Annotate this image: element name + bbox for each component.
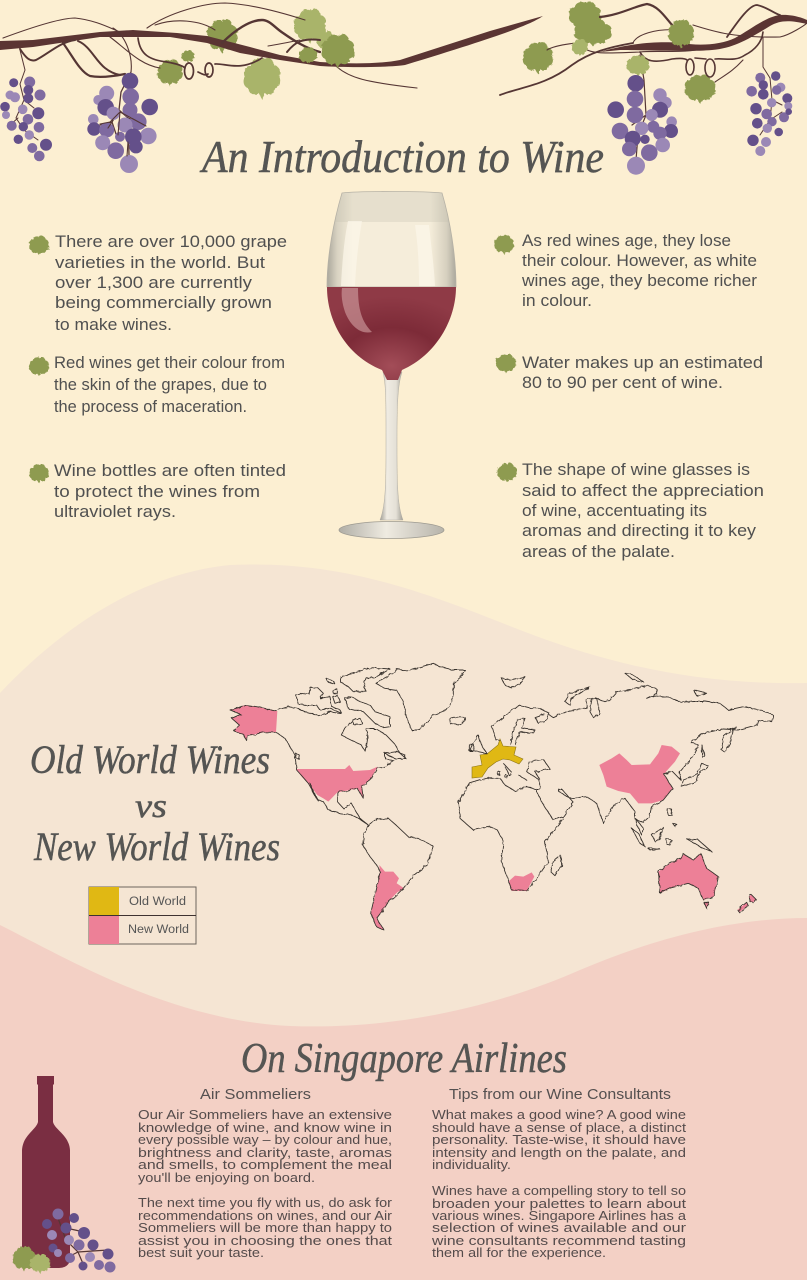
text: There are over 10,000 grape [55, 232, 287, 251]
text: Red wines get their colour from [54, 353, 285, 372]
icon: leaf bullet [494, 235, 514, 254]
icon: wine bottle with grapes [13, 1076, 115, 1273]
fact: tinted bottles [29, 461, 286, 521]
paragraph 1 [432, 1107, 686, 1172]
branch [600, 15, 807, 52]
fact: grape varieties [29, 232, 287, 334]
paragraph 2: recommendations on wines, and our Air [138, 1208, 393, 1223]
tendrils [3, 3, 417, 155]
legend: old world: Old World [129, 896, 186, 908]
wine [327, 287, 456, 380]
branch [0, 16, 543, 67]
text [55, 232, 287, 334]
grape cluster 3 [607, 75, 678, 175]
paragraph 1: personality. Taste-wise, it should have [432, 1132, 686, 1147]
text block: Tips from our Wine Consultants [431, 1087, 687, 1260]
paragraph 2: wine consultants recommend tasting [431, 1233, 686, 1248]
grape cluster 1 [0, 76, 52, 161]
icon: leaf bullet [497, 463, 517, 482]
text block: Air Sommeliers [138, 1087, 393, 1260]
paragraph 2: assist you in choosing the ones that [138, 1233, 392, 1248]
text: the process of maceration. [54, 397, 247, 416]
glass highlights [341, 221, 435, 286]
text [522, 460, 764, 561]
text: 80 to 90 per cent of wine. [522, 373, 723, 392]
icon: leaf bullet [29, 464, 49, 483]
world map [230, 663, 773, 930]
paragraph 2: Wines have a compelling story to tell so [432, 1183, 686, 1198]
heading: Old World Wines vs New World Wines: vs [135, 788, 167, 825]
leaves behind the branch [523, 2, 715, 104]
text: aromas and directing it to key [522, 521, 757, 540]
paragraph 1: What makes a good wine? A good wine [432, 1107, 686, 1122]
text: to protect the wines from [54, 482, 260, 501]
background: pink airlines wave [0, 918, 807, 1280]
paragraph 2: The next time you fly with us, do ask for [138, 1195, 393, 1210]
map: coastlines of Eurasia, Africa and Oceania [458, 673, 773, 912]
stem [380, 372, 403, 520]
text: ultraviolet rays. [54, 502, 176, 521]
text: over 1,300 are currently [55, 273, 253, 292]
background: beige world wines wave [0, 564, 807, 1280]
grape stems over cluster [100, 112, 146, 156]
fact: ageing [494, 231, 757, 310]
paragraph 1: should have a sense of place, a distinct [432, 1120, 686, 1135]
grapes [42, 1208, 116, 1272]
paragraph 2: them all for the experience. [432, 1245, 606, 1260]
text: in colour. [522, 291, 592, 310]
text: Water makes up an estimated [522, 353, 763, 372]
paragraph 1: brightness and clarity, taste, aromas [138, 1145, 393, 1160]
text: The shape of wine glasses is [522, 460, 750, 479]
paragraph 1: Our Air Sommeliers have an extensive [138, 1107, 392, 1122]
title: An Introduction to Wine: An Introduction to Wine [199, 131, 604, 182]
legend [89, 887, 196, 944]
paragraph 2 [431, 1183, 687, 1260]
icon: leaf bullet [29, 236, 49, 255]
subheading: Air Sommeliers [200, 1087, 311, 1103]
paragraph 2 [138, 1195, 393, 1260]
paragraph 2: various wines. Singapore Airlines has a [432, 1208, 687, 1223]
upper glass shade [335, 192, 449, 222]
heading: Old World Wines vs New World Wines: Old World Wines [30, 737, 270, 782]
text: of wine, accentuating its [522, 501, 707, 520]
bowl glass [327, 192, 456, 287]
icon: leaf bullet [496, 354, 516, 373]
text: to make wines. [55, 315, 172, 334]
fact: water content [496, 353, 763, 392]
text: their colour. However, as white [522, 251, 757, 270]
foot [339, 522, 444, 538]
icon: leaf bullet [29, 357, 49, 376]
paragraph 2: selection of wines available and our [432, 1220, 687, 1235]
grape cluster 2 [87, 73, 158, 173]
paragraph 1: knowledge of wine, and know wine in [138, 1120, 392, 1135]
paragraph 1: and smells, to complement the meal [138, 1157, 392, 1172]
fact: red wine colour [29, 353, 285, 416]
text: areas of the palate. [522, 542, 675, 561]
text: the skin of the grapes, due to [54, 375, 267, 394]
text: wines age, they become richer [521, 271, 757, 290]
vine: left branch with leaves and grapes [0, 3, 543, 173]
leaves [13, 1246, 50, 1273]
wine highlight [342, 288, 372, 333]
paragraph 1: intensity and length on the palate, and [432, 1145, 686, 1160]
paragraph 2: Sommeliers will be more than happy to [138, 1220, 392, 1235]
text: said to affect the appreciation [522, 481, 764, 500]
grape cluster 4 [746, 71, 792, 156]
paragraph 1 [138, 1107, 393, 1185]
leaves in front of the branch [572, 20, 694, 76]
grape stems [58, 1218, 108, 1266]
paragraph 1: you'll be enjoying on board. [138, 1170, 315, 1185]
paragraph 1: individuality. [432, 1157, 511, 1172]
text: varieties in the world. But [55, 253, 265, 272]
paragraph 1: every possible way – by colour and hue, [138, 1132, 392, 1147]
text [522, 353, 763, 392]
text: As red wines age, they lose [522, 231, 731, 250]
subheading: Tips from our Wine Consultants [449, 1087, 671, 1103]
text: Wine bottles are often tinted [54, 461, 286, 480]
leaves behind the branch [157, 9, 335, 99]
text [54, 461, 286, 521]
map: coastlines of the Americas and Greenland [230, 663, 465, 930]
tendrils [500, 4, 807, 160]
paragraph 2: broaden your palettes to learn about [432, 1196, 686, 1211]
text [54, 353, 285, 416]
map: New World regions in Africa, Asia and Oceania [508, 745, 756, 912]
map: New World regions in the Americas [230, 705, 404, 930]
text: being commercially grown [55, 293, 272, 312]
map: Old World region in western Europe [472, 739, 523, 778]
heading: On Singapore Airlines: On Singapore Airlines [241, 1036, 567, 1082]
vine: right branch with leaves and grapes [500, 2, 807, 175]
heading: Old World Wines vs New World Wines [30, 737, 280, 869]
heading: Old World Wines vs New World Wines: New World Wines [33, 824, 280, 869]
bottle [22, 1076, 70, 1268]
fact: glass shape [497, 460, 764, 561]
text [521, 231, 757, 310]
paragraph 2: best suit your taste. [138, 1245, 264, 1260]
wine glass illustration [327, 192, 456, 538]
legend: new world: New World [128, 924, 189, 936]
leaves in front of the branch [299, 34, 354, 68]
